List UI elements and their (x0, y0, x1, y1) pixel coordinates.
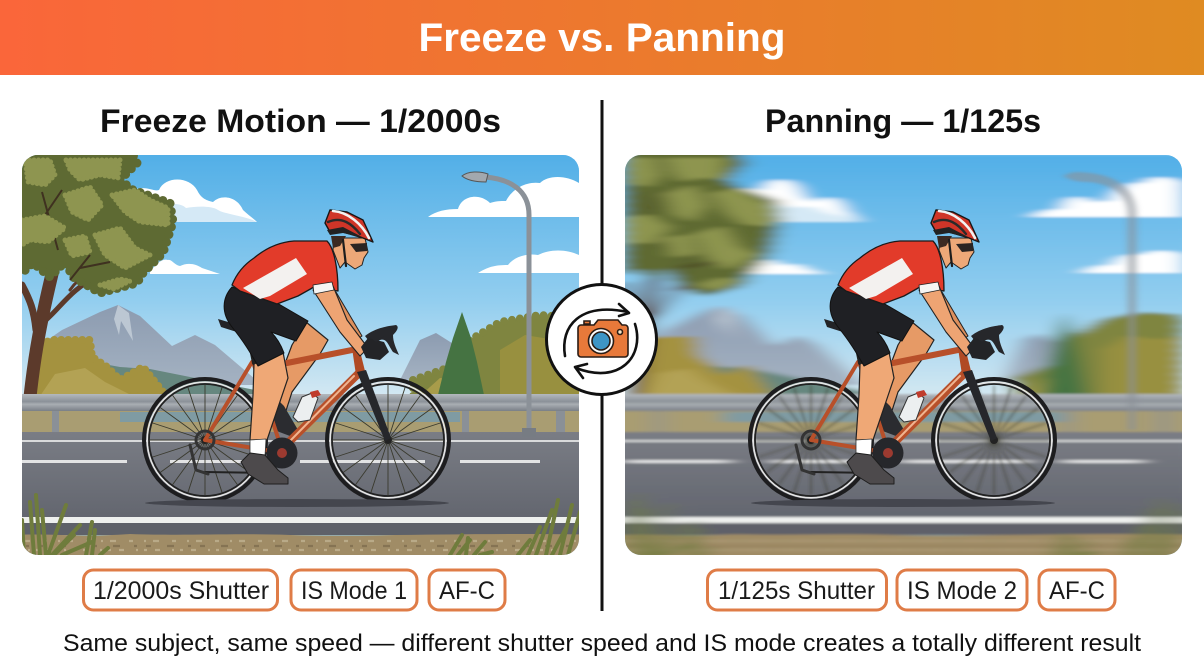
roadside scenery (0, 155, 610, 560)
street lamp (462, 172, 536, 437)
chip: autofocus: AF-C (439, 577, 495, 605)
chip: IS mode: IS Mode 2 (907, 577, 1017, 605)
chip: shutter: 1/125s Shutter (718, 577, 875, 605)
chip: autofocus: AF-C (1049, 577, 1105, 605)
center divider (600, 100, 604, 611)
header banner (0, 0, 1204, 75)
caption: Same subject, same speed — different shutter speed and IS mode creates a totally different result (63, 630, 1141, 657)
cyclist on bike (145, 210, 449, 507)
chip: shutter (84, 570, 278, 610)
rear wheel, spinning (750, 379, 872, 501)
chip: shutter: 1/2000s Shutter (93, 577, 269, 605)
blurred street lamp (1064, 172, 1132, 430)
camera (578, 320, 628, 357)
cyclist on bike, sharp (751, 210, 1055, 507)
chip: IS mode (291, 570, 417, 610)
heading: panning: Panning — 1/125s (765, 103, 1041, 139)
chip: shutter (708, 570, 886, 610)
motion-blurred scenery (603, 155, 1204, 560)
title: Freeze vs. Panning (418, 16, 786, 60)
rotate arrows (564, 304, 637, 378)
chip: autofocus (429, 570, 505, 610)
heading: freeze motion: Freeze Motion — 1/2000s (100, 103, 501, 139)
chips: freeze settings (84, 570, 505, 610)
chips: panning settings (708, 570, 1115, 610)
panel: panning illustration (603, 155, 1204, 560)
panel: freeze motion illustration (0, 155, 610, 560)
front wheel, spinning (933, 379, 1055, 501)
rear wheel (144, 379, 266, 501)
chip: autofocus (1039, 570, 1115, 610)
front wheel (327, 379, 449, 501)
icon: camera with rotate arrows (546, 284, 656, 394)
chip: IS mode: IS Mode 1 (301, 577, 407, 605)
chip: IS mode (897, 570, 1027, 610)
